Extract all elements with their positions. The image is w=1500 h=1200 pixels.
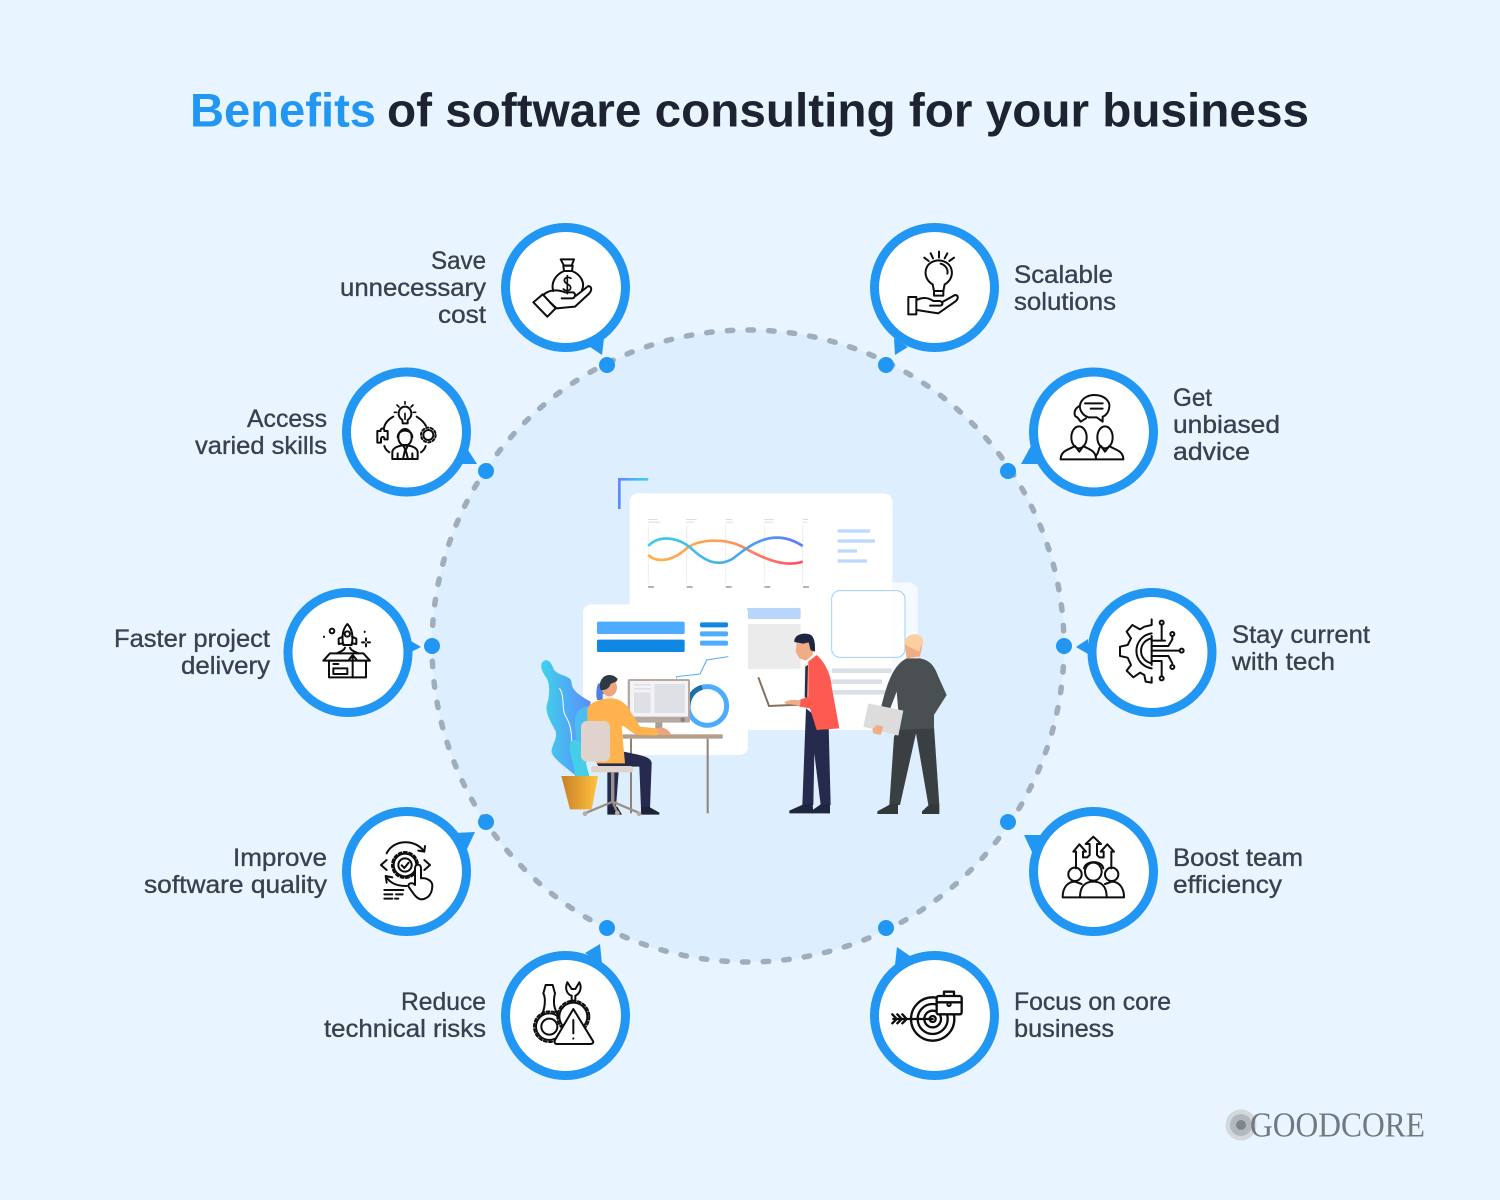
badge (506, 956, 626, 1076)
icon: two people talking (1061, 395, 1123, 459)
icon: hand with light bulb (908, 252, 958, 314)
label (1014, 261, 1116, 316)
wave chart (648, 519, 809, 588)
badge (1034, 372, 1154, 492)
title: of software consulting for your business (387, 84, 1309, 136)
pointer (1076, 639, 1088, 654)
label: cost (438, 301, 486, 329)
benefit: get unbiased advice (1021, 372, 1280, 492)
glass card (832, 591, 905, 657)
chart legend (838, 529, 875, 563)
pointer (1021, 446, 1041, 464)
badge (1092, 592, 1212, 712)
computer monitor (628, 679, 690, 729)
dashboard bars (597, 622, 728, 678)
seated developer (587, 675, 672, 815)
label (324, 988, 486, 1043)
corner bracket (619, 479, 648, 509)
label: unbiased (1173, 411, 1280, 439)
pointer (411, 641, 421, 652)
label: Stay current (1232, 621, 1370, 649)
pointer (895, 947, 910, 965)
label: Scalable (1014, 261, 1113, 289)
icon: tools and warning triangle (534, 982, 593, 1044)
icon: gear with circuit (1120, 619, 1184, 683)
pointer (455, 832, 475, 849)
icon: target with arrow and briefcase (892, 992, 962, 1041)
label: solutions (1014, 288, 1116, 316)
man in red jacket with laptop (758, 634, 839, 813)
benefit: faster project delivery (114, 592, 421, 712)
label: efficiency (1173, 871, 1283, 899)
logo: GoodCore: GOODCORE (1250, 1106, 1425, 1144)
dashboard panel: chart (630, 493, 892, 730)
icon: team with rising arrows (1063, 837, 1124, 897)
desk (623, 734, 723, 813)
benefit: scalable solutions (874, 228, 1116, 355)
man in grey suit with folder (863, 634, 947, 814)
label: Boost team (1173, 844, 1303, 872)
label (1173, 384, 1280, 466)
label (144, 844, 328, 899)
label: delivery (181, 652, 271, 680)
badge (1034, 812, 1154, 932)
label: business (1014, 1015, 1114, 1043)
badge (346, 812, 466, 932)
benefit: focus on core business (874, 947, 1171, 1076)
label: advice (1173, 438, 1250, 466)
label (195, 405, 327, 460)
ring connector dots (424, 357, 1072, 936)
pointer (585, 944, 602, 964)
label (1014, 988, 1171, 1043)
benefit: stay current with tech (1076, 592, 1370, 712)
pointer (460, 450, 477, 464)
content blocks (743, 608, 892, 695)
office chair (581, 721, 641, 816)
benefit: reduce technical risks (324, 944, 626, 1076)
badge (346, 372, 466, 492)
label: unnecessary (340, 274, 487, 302)
label: Improve (233, 844, 327, 872)
label: technical risks (324, 1015, 486, 1043)
label (114, 625, 271, 680)
badge (506, 228, 626, 348)
badge (874, 956, 994, 1076)
icon: rocket launching from box (323, 624, 370, 677)
label: varied skills (195, 432, 327, 460)
label (1231, 621, 1370, 676)
label: with tech (1231, 648, 1335, 676)
benefit: boost team efficiency (1024, 812, 1303, 932)
central circle with dashed ring (432, 330, 1064, 962)
label (1173, 844, 1303, 899)
label: Faster project (114, 625, 270, 653)
icon: gear, check and pointing hand (381, 842, 432, 899)
label (340, 247, 487, 329)
plant (541, 660, 598, 809)
dashboard panel: left (583, 604, 748, 755)
icon: hand with money bag (533, 259, 591, 317)
label: Get (1173, 384, 1212, 412)
label: Focus on core (1014, 988, 1171, 1016)
label: Save (431, 247, 486, 275)
badge (874, 228, 994, 348)
pointer (1024, 835, 1042, 852)
donut chart (688, 687, 727, 725)
pointer (590, 338, 604, 355)
label: software quality (144, 871, 328, 899)
benefit: save unnecessary cost (340, 228, 626, 355)
central illustration: team and dashboards (541, 479, 947, 816)
title: Benefits (190, 84, 376, 136)
label: Reduce (401, 988, 486, 1016)
badge (288, 592, 408, 712)
dashboard panel: glass right (743, 583, 918, 730)
benefit: access varied skills (195, 372, 477, 492)
benefit: improve software quality (144, 812, 475, 932)
icon: person with skills (377, 402, 436, 459)
label: Access (247, 405, 327, 433)
pointer (894, 338, 908, 355)
